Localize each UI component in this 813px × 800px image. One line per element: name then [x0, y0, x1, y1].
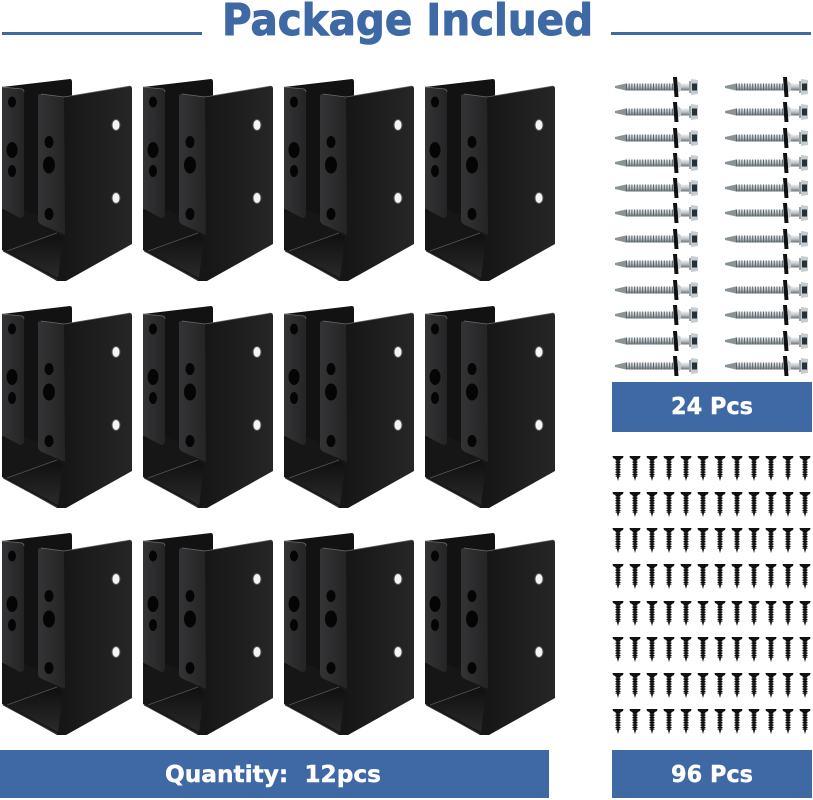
bracket 8 — [425, 306, 555, 508]
bracket 9 — [2, 533, 132, 735]
bracket 11 — [284, 533, 414, 735]
bracket 2 — [143, 79, 273, 281]
bracket 10 — [143, 533, 273, 735]
panel: brackets row 3 — [2, 533, 555, 735]
title — [2, 0, 811, 46]
bracket 6 — [143, 306, 273, 508]
bracket 5 — [2, 306, 132, 508]
banner: 96 pcs — [612, 750, 812, 798]
panel: silver hex screws — [615, 77, 808, 376]
banner: 24 pcs: 24 Pcs — [671, 394, 753, 420]
panel: brackets row 1 — [2, 79, 555, 281]
bracket 3 — [284, 79, 414, 281]
panel: black screws — [612, 456, 810, 734]
banner: 96 pcs: 96 Pcs — [671, 762, 753, 788]
banner: quantity — [0, 750, 549, 798]
panel: brackets row 2 — [2, 306, 555, 508]
bracket 4 — [425, 79, 555, 281]
bracket 1 — [2, 79, 132, 281]
bracket 12 — [425, 533, 555, 735]
banner: quantity: Quantity: 12pcs — [165, 762, 381, 788]
banner: 24 pcs — [612, 382, 812, 432]
bracket 7 — [284, 306, 414, 508]
